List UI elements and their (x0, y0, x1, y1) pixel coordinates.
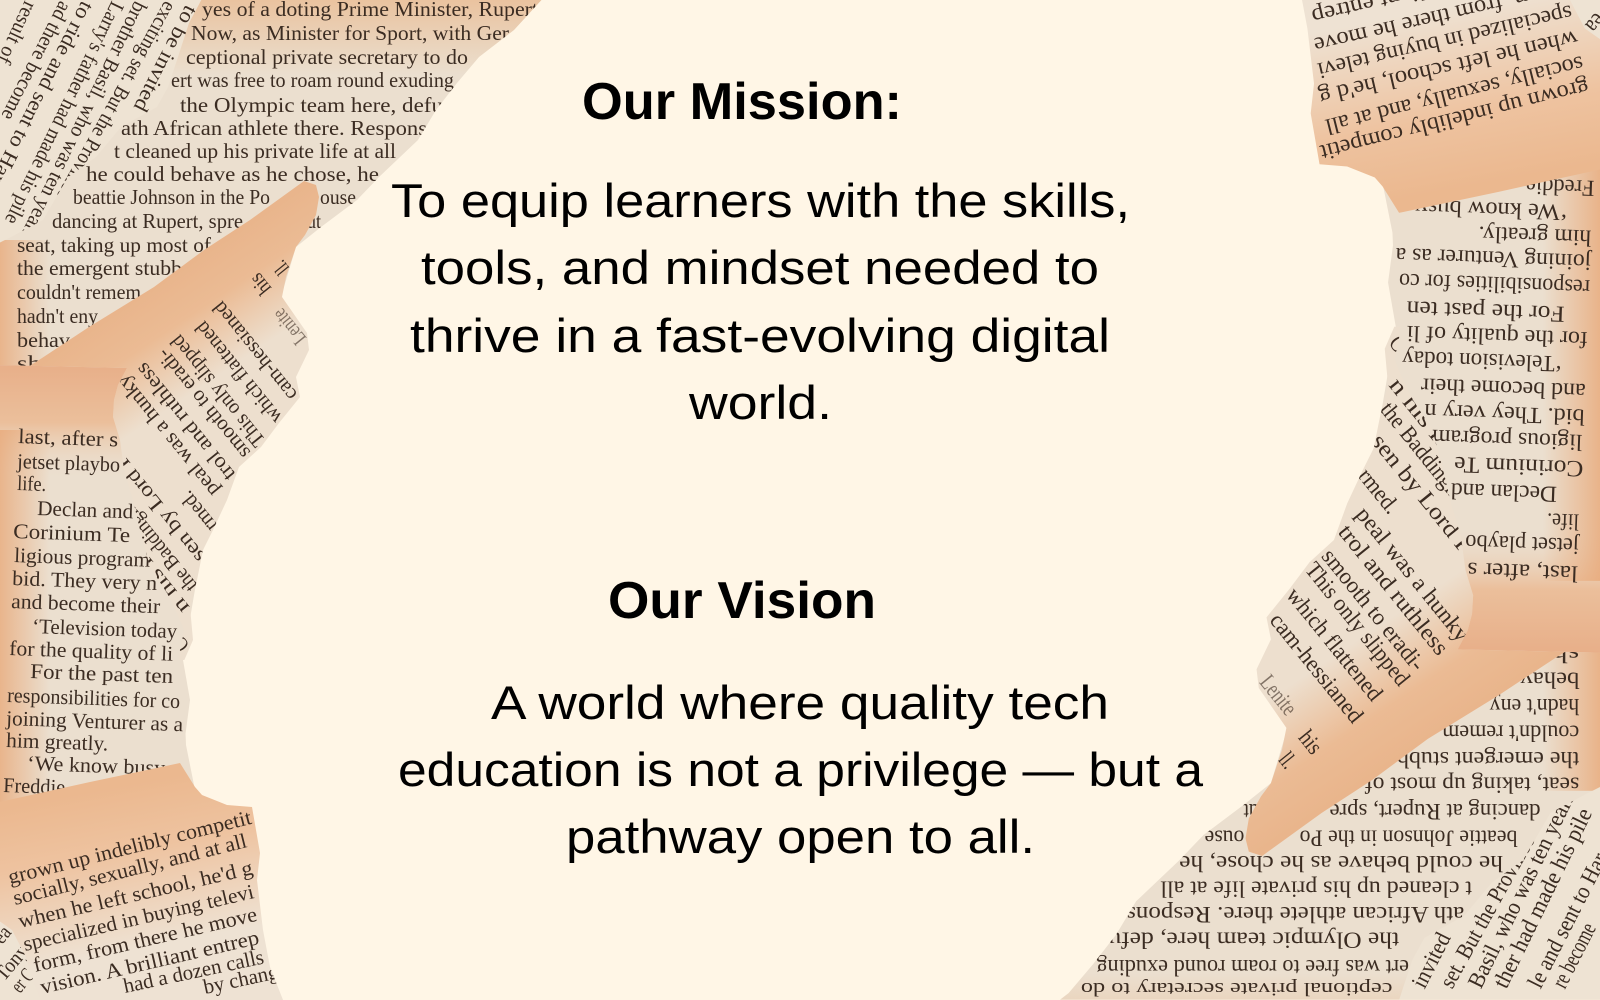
folded strip: ll. (268, 256, 294, 280)
lower page right: for the quality of li (1406, 320, 1588, 352)
base book page: ouse (320, 185, 356, 209)
mission heading: Our Mission: (582, 73, 902, 131)
folded strip right: cam-hessianed (1264, 608, 1369, 729)
folded strip right: rmed. (1352, 463, 1405, 519)
base book page right: ceptional private secretary to do (1081, 978, 1392, 999)
top right page (1302, 0, 1600, 213)
base book page right (1060, 246, 1600, 1000)
mission text: To equip learners with the skills, (391, 174, 1130, 227)
base book page: the Olympic team here, defu (180, 93, 444, 117)
base book page: ut (307, 209, 321, 233)
lower left page: him greatly. (6, 728, 109, 756)
lower left page: life. (17, 471, 47, 496)
folded strip right: trol and ruthless (1333, 520, 1454, 661)
lower left page: and become their (11, 589, 161, 618)
vision text: education is not a privilege — but a (398, 743, 1204, 796)
base book page: ert was free to roam round exuding (171, 68, 454, 92)
base book page right: couldn't remem (1442, 720, 1579, 746)
top left page (0, 0, 210, 250)
folded strip right: This only slipped (1299, 557, 1415, 692)
bottom left page: form, from there he move (31, 902, 259, 977)
base book page right: ath African athlete there. Respons (1126, 901, 1464, 927)
lower left page: For the past ten (30, 659, 174, 688)
base book page right: seat, taking up most of (1365, 772, 1579, 798)
folded strip: This only slipped (165, 330, 270, 452)
base book page: dancing at Rupert, spre (52, 209, 243, 233)
folded strip: trol and ruthless (130, 358, 240, 486)
folded strip right: his (1293, 725, 1328, 760)
lower page right: and become their (1420, 372, 1586, 404)
folded strip: smooth to eradi- (151, 344, 255, 464)
folded strip (30, 181, 319, 660)
folded strip: peal was a hunky (111, 370, 224, 502)
lower left page: Freddie (3, 773, 66, 799)
top right page: specialized in buying televi (1315, 0, 1575, 83)
folded strip: the Baddinghams (99, 478, 202, 597)
lower left page: ligious program (14, 543, 151, 572)
base book page: Now, as Minister for Sport, with Ger (191, 21, 509, 45)
lower page right (1384, 179, 1600, 652)
base book page (0, 0, 542, 732)
base book page right: ut (1243, 798, 1259, 824)
folded strip right (1246, 326, 1565, 856)
base book page right: he could behave as he chose, he (1179, 850, 1503, 876)
lower left page: joining Venturer as a (5, 706, 184, 736)
folded strip right: which flattened (1281, 583, 1388, 707)
lower page right: last, after s (1467, 557, 1578, 586)
lower left page: jetset playbo (16, 449, 121, 477)
bottom left page: vision. A brilliant entrep (38, 925, 261, 999)
base book page right: the emergent stubb (1397, 746, 1579, 772)
lower page right: ‘We know busy (1415, 194, 1568, 225)
base book page right: ert was free to roam round exuding (1096, 954, 1409, 980)
bottom left page: socially, sexually, and at all (10, 828, 249, 910)
vision text: A world where quality tech (491, 676, 1109, 729)
bottom left page (0, 755, 295, 1000)
lower page right: him greatly. (1478, 221, 1592, 251)
lower left page: bid. They very n (12, 566, 158, 595)
lower left page: last, after s (18, 424, 119, 451)
lower page right: life. (1546, 507, 1579, 535)
base book page right: t cleaned up his private life at all (1160, 875, 1472, 901)
lower left page: responsibilities for co (7, 683, 181, 713)
vision heading: Our Vision (608, 572, 876, 630)
corner page right: Basil, who was ten years (1463, 787, 1581, 992)
lower left page: for the quality of li (9, 636, 174, 666)
lower left page: ‘We know busy (27, 751, 166, 780)
base book page: the emergent stubb (17, 256, 182, 280)
lower page right: For the past ten (1406, 295, 1565, 327)
lower page right: responsibilities for co (1399, 268, 1590, 300)
top right page: socially, sexually, and at all (1323, 50, 1586, 140)
vision text (398, 676, 1204, 863)
base book page: ath African athlete there. Respons (121, 116, 427, 140)
bottom left page: by chang (201, 960, 281, 999)
lower left page: Declan and (37, 496, 134, 523)
top right page: when he left school, he'd g (1316, 25, 1580, 110)
bottom left page: when he left school, he'd g (16, 855, 255, 933)
folded strip right: peal was a hunky (1350, 502, 1475, 647)
folded strip right: n his left n (1383, 373, 1482, 486)
base book page: beattie Johnson in the Po (73, 185, 270, 209)
folded strip: cam-hessianed (207, 296, 302, 406)
folded strip: which flattened (189, 316, 287, 429)
lower page right: ‘Television today (1401, 345, 1563, 377)
base book page right: sh (1552, 641, 1579, 667)
mission text (391, 174, 1130, 429)
folded strip: his (244, 269, 276, 300)
folded strip right: ll. (1273, 747, 1301, 774)
base book page: t cleaned up his private life at all (114, 139, 396, 163)
base book page: he could behave as he chose, he (86, 162, 379, 186)
bottom left page: had a dozen calls (121, 945, 266, 998)
bottom left page: specialized in buying televi (21, 879, 256, 956)
base book page: sh (17, 351, 42, 375)
lower page right: Corinium Te (1454, 451, 1584, 481)
base book page right: dancing at Rupert, spre (1329, 798, 1541, 824)
lower left page (0, 365, 194, 794)
folded strip: Lenite (267, 304, 311, 350)
corner page right: ther had made his pile (1488, 804, 1598, 992)
mission text: thrive in a fast-evolving digital (410, 309, 1110, 362)
top left page: brother Basil, who was ten years (16, 0, 152, 244)
mission text: tools, and mindset needed to (421, 241, 1099, 294)
top left page: exciting set. But the Province (52, 0, 182, 205)
corner scrap (0, 922, 33, 992)
base book page right: ouse (1205, 825, 1244, 851)
base book page: couldn't remem (17, 280, 141, 304)
lower page right: joining Venturer as a (1395, 242, 1593, 275)
lower page right: Freddie (1526, 172, 1595, 201)
panel: torn paper collage right (1060, 0, 1600, 1000)
lower left page: ‘Television today (32, 614, 178, 643)
base book page right: behav (1520, 667, 1579, 693)
base book page: hadn't eny (17, 304, 98, 328)
mission text: world. (688, 376, 832, 429)
lower page right: ligious program (1432, 424, 1583, 455)
lower page right: bid. They very n (1423, 398, 1585, 430)
folded strip: Co (163, 626, 194, 657)
folded strip right: Co (1383, 331, 1418, 364)
folded strip right: the Baddinghams (1375, 397, 1488, 528)
corner scrap right (1572, 0, 1600, 39)
base book page right: the Olympic team here, defu (1108, 926, 1399, 952)
panel: torn paper collage left (0, 0, 555, 1000)
lower page right: Declan and (1450, 477, 1557, 507)
folded strip right: Lenite (1254, 670, 1302, 721)
folded strip: n his left n (104, 516, 194, 619)
corner page right: invited (1407, 928, 1457, 992)
folded strip: sen by Lord Pop- (88, 425, 210, 568)
vision text: pathway open to all. (566, 810, 1035, 863)
base book page: ceptional private secretary to do (186, 45, 468, 69)
folded strip: rmed. (174, 486, 222, 537)
lower page right: jetset playbo (1465, 529, 1580, 559)
folded strip right: sen by Lord Pop- (1366, 429, 1500, 586)
base book page right: beattie Johnson in the Po (1300, 825, 1517, 851)
base book page: seat, taking up most of (17, 233, 211, 257)
lower left page: Corinium Te (13, 519, 131, 547)
base book page: behav (17, 328, 71, 352)
corner scrap: er C (5, 963, 39, 997)
bottom left page: grown up indelibly competit (5, 805, 254, 889)
corner page right: set. But the Province (1435, 830, 1540, 993)
folded strip right: smooth to eradi- (1316, 544, 1430, 676)
corner page right (1400, 787, 1600, 1000)
top left page: to be invited (129, 2, 203, 116)
base book page right: hadn't eny (1489, 693, 1579, 719)
top right page: grown up indelibly competit (1317, 73, 1592, 166)
